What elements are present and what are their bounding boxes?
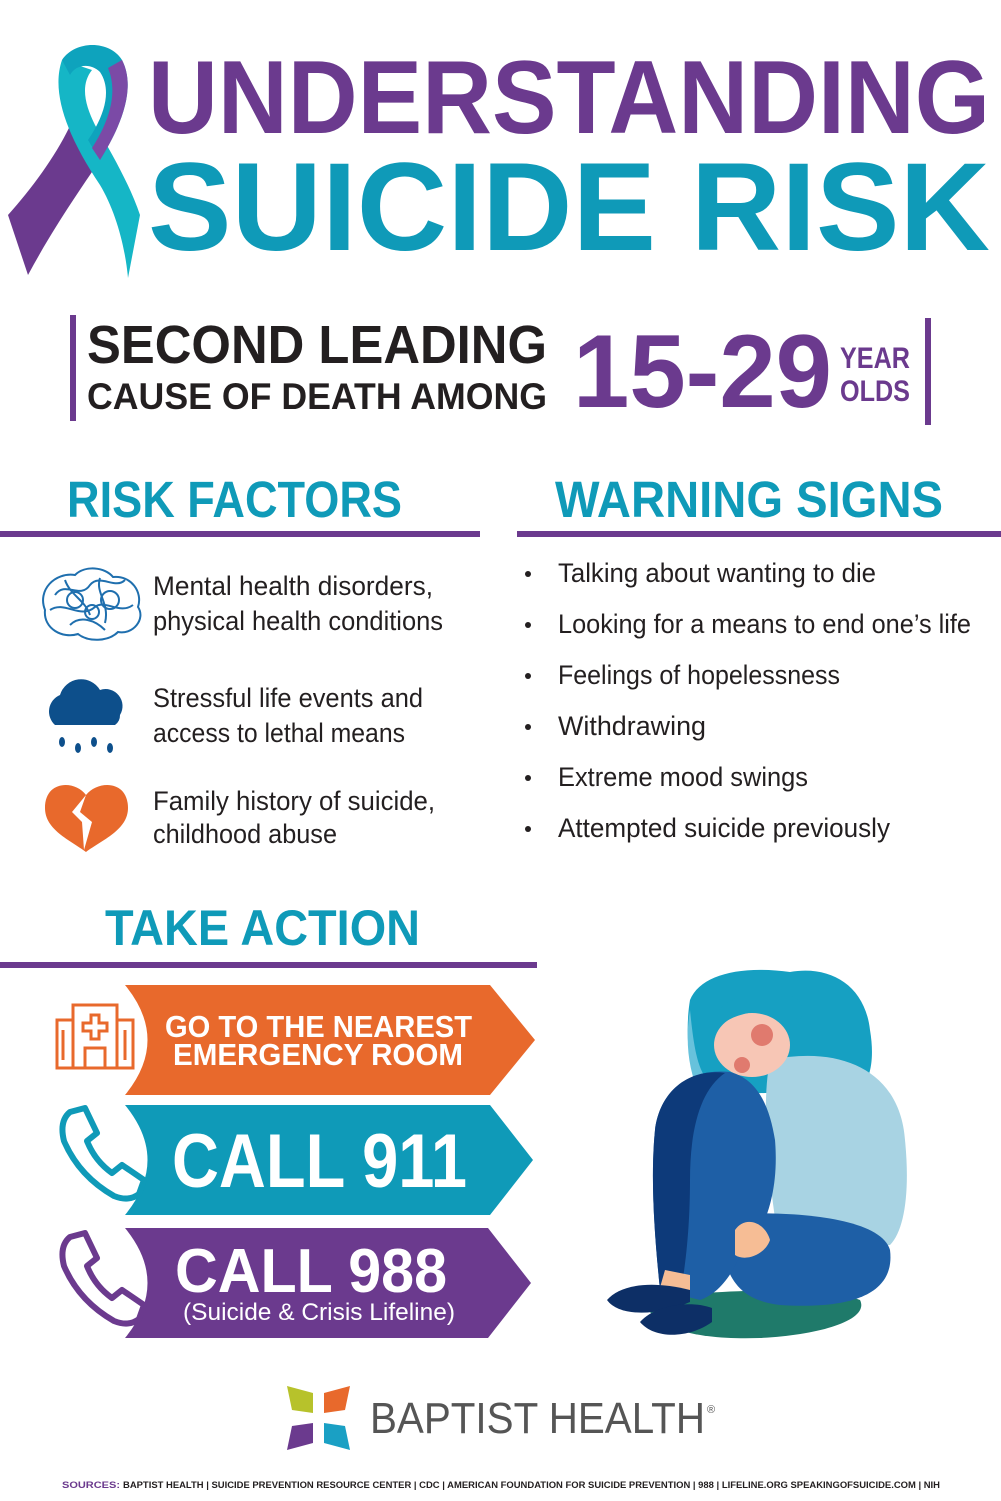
sources: SOURCES: [62,1480,120,1491]
action: emergency room: EMERGENCY ROOM [173,1037,463,1072]
heading: risk factors [0,471,480,537]
statistic banner: 15-29 [573,314,832,430]
icon: awareness ribbon [8,45,140,278]
risk factors list: Mental health disorders, [153,571,433,601]
warning signs list: Looking for a means to end one’s life [558,609,971,639]
illustration: sad girl [607,970,907,1338]
title: SUICIDE RISK [148,138,990,277]
icon: rain cloud [49,679,123,753]
risk factors list: access to lethal means [153,718,405,748]
logo: baptist health: BAPTIST HEALTH [370,1394,705,1443]
risk factors list: Family history of suicide, [153,786,435,816]
action: emergency room: GO TO THE NEAREST [165,1009,472,1044]
risk factors list [43,568,443,852]
heading: take action: TAKE ACTION [105,900,420,956]
warning signs list: Extreme mood swings [558,762,808,792]
warning signs list: Attempted suicide previously [558,813,890,843]
icon: broken heart [45,785,128,852]
heading: risk factors: RISK FACTORS [67,471,402,528]
warning signs list: Talking about wanting to die [558,558,876,588]
statistic banner [70,314,931,430]
heading: take action [0,900,537,968]
warning signs list [525,558,971,843]
action: call 911 [62,1105,533,1215]
warning signs list: Feelings of hopelessness [558,660,840,690]
statistic banner: SECOND LEADING [87,315,547,375]
icon: phone [62,1233,144,1324]
risk factors list: Stressful life events and [153,683,423,713]
action: call 988: (Suicide & Crisis Lifeline) [183,1299,455,1326]
icon: phone [62,1108,144,1199]
icon: brain [43,568,140,640]
action: emergency room [57,985,535,1095]
action: call 988: CALL 988 [175,1237,447,1306]
heading: warning signs: WARNING SIGNS [555,471,943,528]
statistic banner: YEAR [840,342,910,375]
title [148,40,990,277]
icon: hospital [57,1005,133,1068]
logo: baptist health [287,1386,715,1450]
warning signs list: Withdrawing [558,711,706,741]
statistic banner: OLDS [840,375,910,408]
risk factors list: physical health conditions [153,606,443,636]
statistic banner: CAUSE OF DEATH AMONG [87,376,547,417]
logo: baptist health: ® [707,1404,715,1416]
sources: BAPTIST HEALTH | SUICIDE PREVENTION RESOURCE CENTER | CDC | AMERICAN FOUNDATION FOR SUICIDE PREVENTION | 988 | LIFELINE.ORG SPEAKINGOFSUICIDE.COM | NIH [123,1480,940,1491]
risk factors list: childhood abuse [153,819,337,849]
action: call 988 [62,1228,531,1338]
action: call 911: CALL 911 [172,1119,467,1204]
